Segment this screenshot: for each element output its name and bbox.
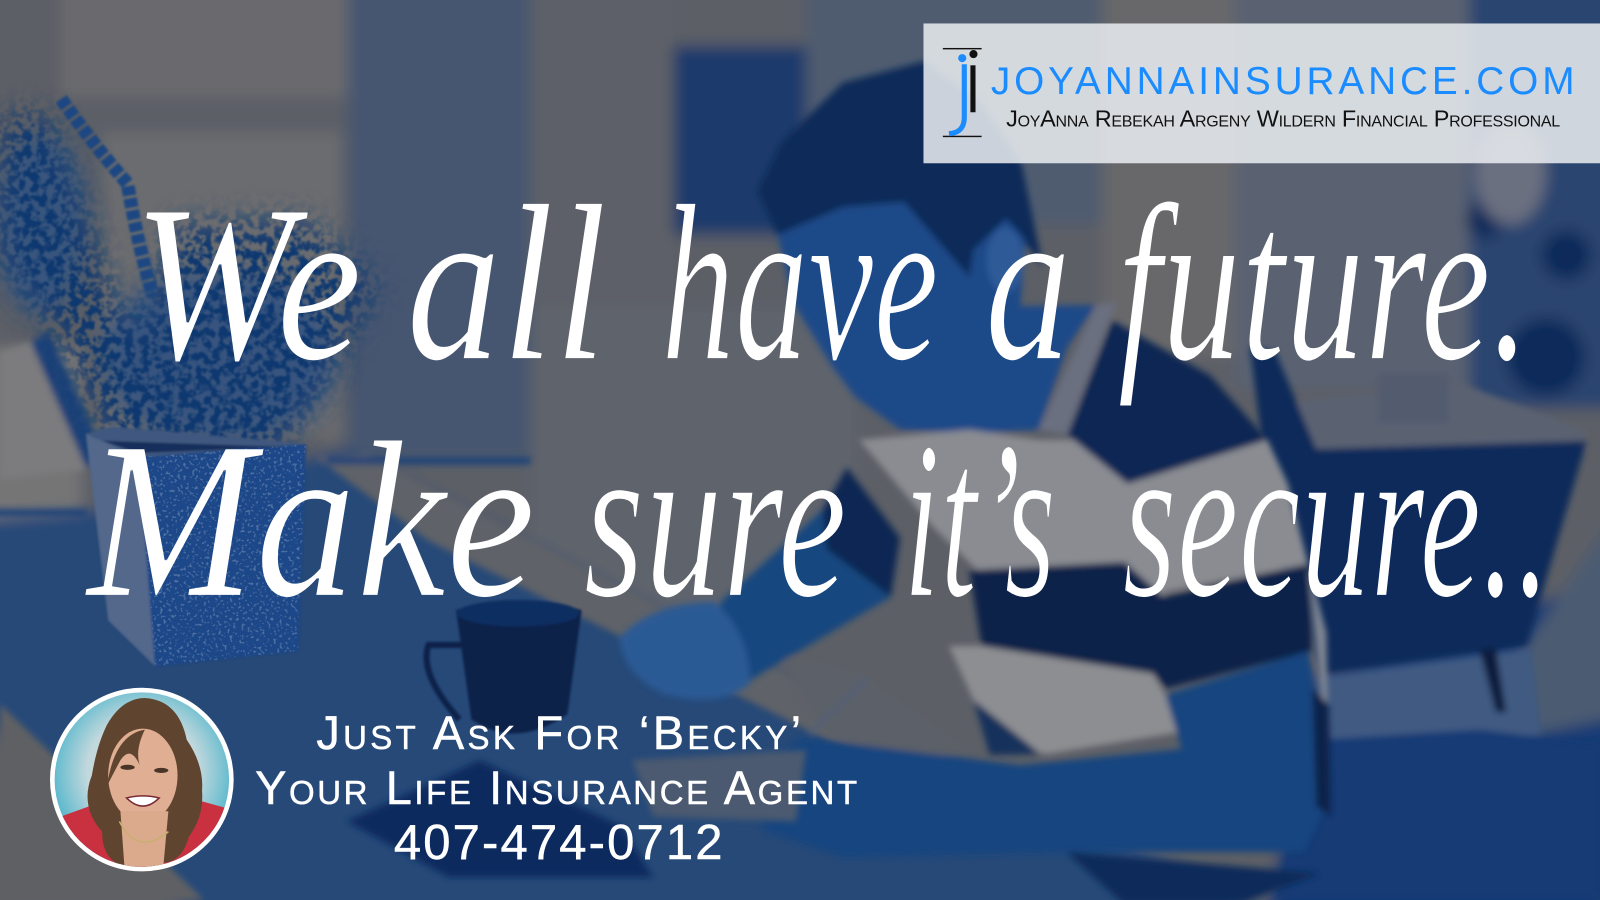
headline line two: sure xyxy=(584,398,847,644)
background photo: mug xyxy=(427,600,582,734)
background photo: table runner xyxy=(0,332,980,900)
logo icon: ji monogram xyxy=(943,48,982,137)
contact line: your life insurance agent: Your Life Insurance Agent xyxy=(255,762,857,814)
writing arm and hand xyxy=(745,651,1329,857)
headline line two: Make xyxy=(84,398,536,644)
website name: JOYANNAINSURANCE.COM xyxy=(991,60,1574,103)
phone number: 407-474-0712 xyxy=(394,816,722,870)
headline line one xyxy=(133,161,1531,407)
hair xyxy=(757,61,1043,278)
headline line one: have xyxy=(661,161,939,407)
headline line two xyxy=(84,398,1551,644)
background photo: notebook on table xyxy=(347,750,806,878)
tagline: JoyAnna Rebekah Argeny Wildern Financial Professional xyxy=(1006,106,1560,132)
paper xyxy=(776,653,964,760)
background photo: plant and pot xyxy=(0,99,378,666)
face and neck xyxy=(778,202,1096,434)
left forearm xyxy=(720,510,891,700)
contact line: just ask for Becky: Just Ask For ‘Becky’ xyxy=(316,707,801,759)
headline line one: a xyxy=(985,161,1071,407)
shirt collar xyxy=(1039,302,1116,435)
background photo: man writing xyxy=(619,61,1331,900)
portrait xyxy=(50,688,235,878)
logo banner xyxy=(923,23,1600,163)
shirt stripes xyxy=(859,430,1308,624)
fist xyxy=(619,602,750,700)
headline line one: all xyxy=(406,161,607,407)
headline line two: it’s xyxy=(903,398,1056,644)
pen xyxy=(810,679,867,733)
background photo: sofa xyxy=(1250,347,1600,900)
headline line one: We xyxy=(133,161,362,407)
